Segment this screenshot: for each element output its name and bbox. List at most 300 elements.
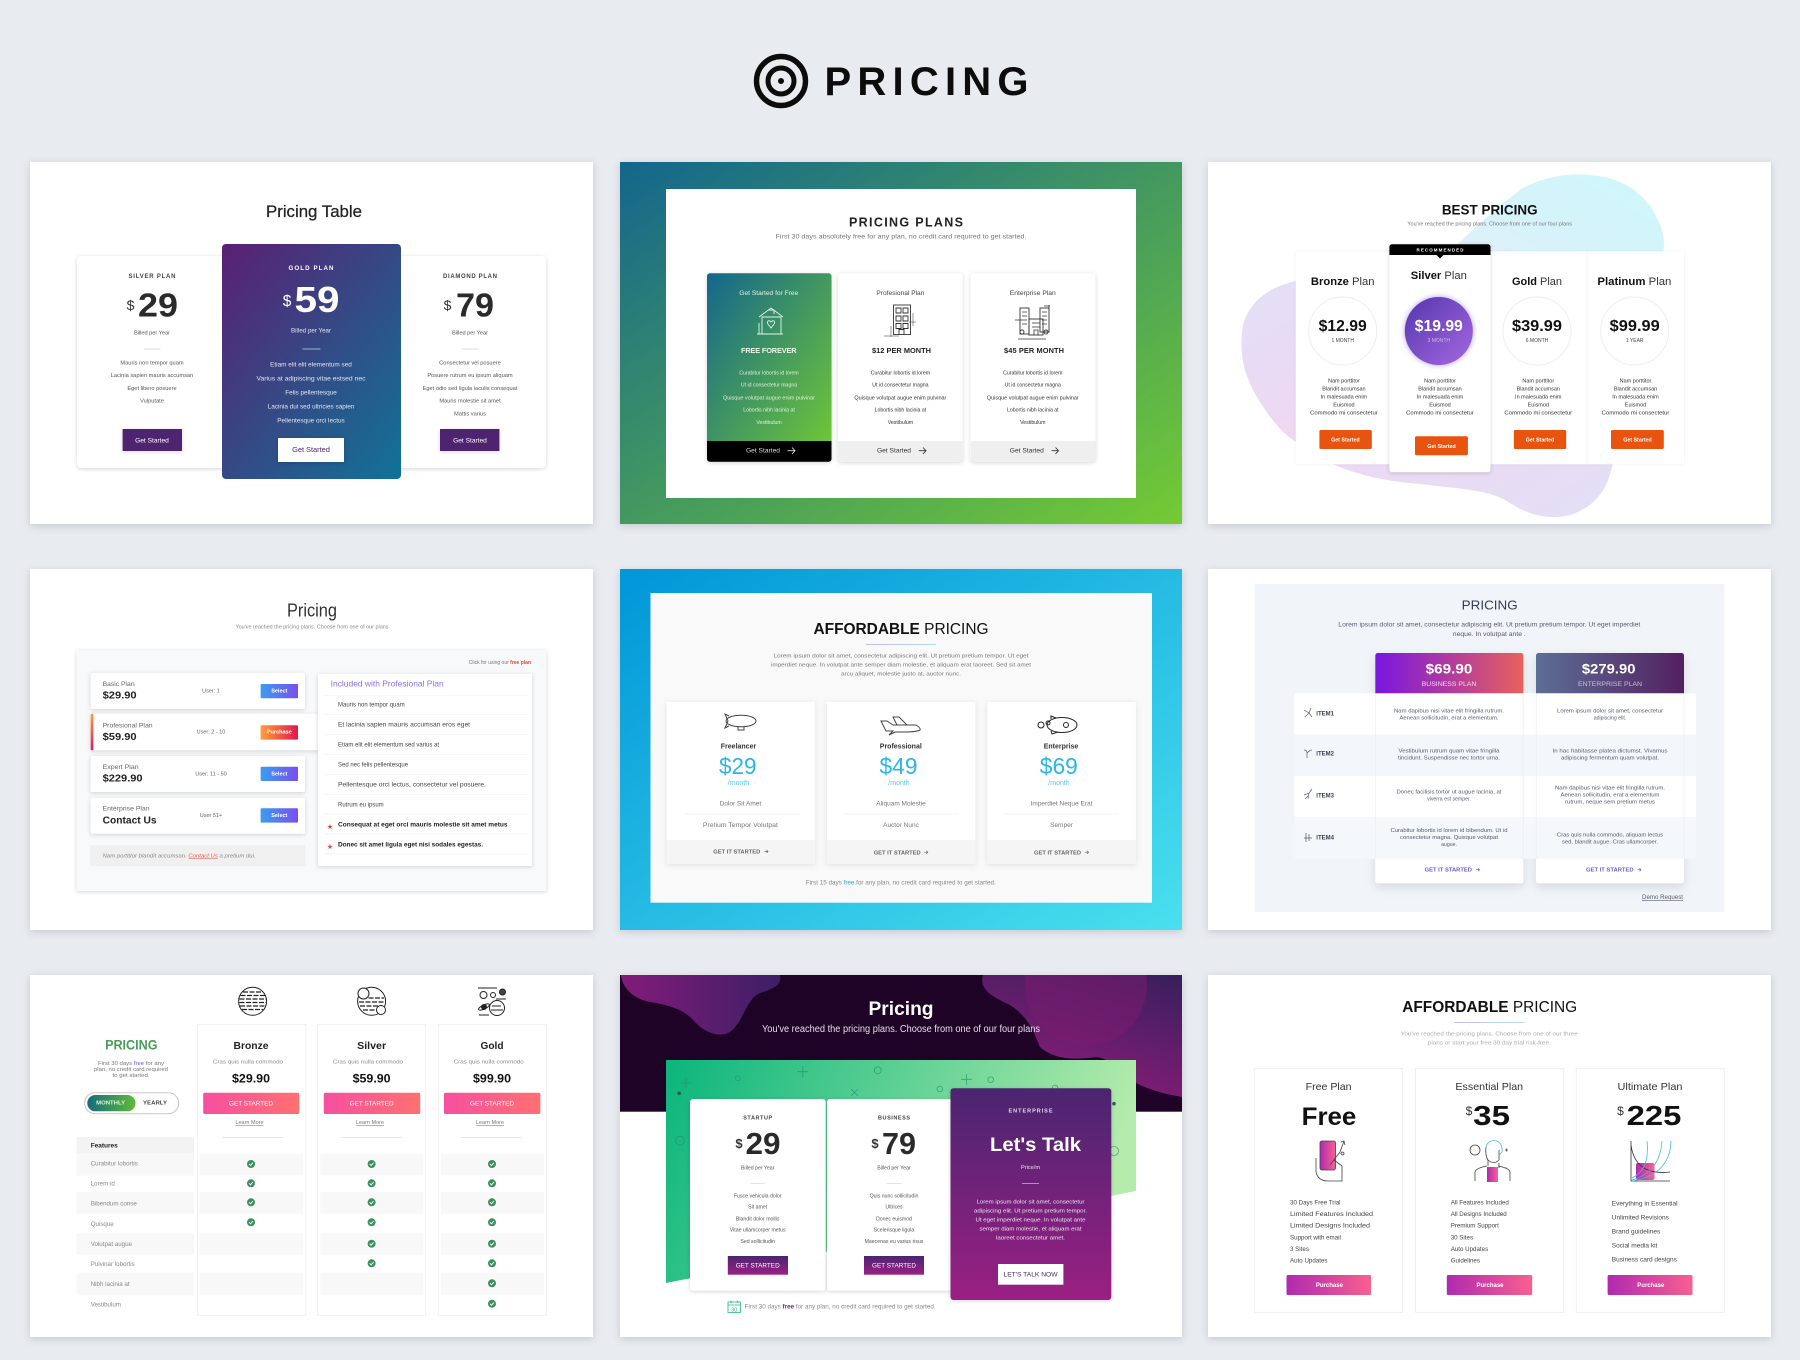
card: silver plan: Vulputate bbox=[140, 398, 164, 404]
card: gold plan: 59 bbox=[294, 279, 340, 320]
feature rows bbox=[1294, 693, 1696, 859]
icons: item glyphs bbox=[1304, 708, 1312, 842]
blob: purple bbox=[1241, 281, 1613, 517]
card: enterprise: Let's Talk bbox=[990, 1135, 1081, 1156]
enterprise plan cells: Lorem ipsum dolor sit amet, consectetur bbox=[1557, 708, 1663, 714]
card: professional plan: Profesional Plan bbox=[876, 290, 925, 297]
plan row: expert: Expert Plan bbox=[103, 764, 139, 771]
card: ultimate plan: Everything in Essential bbox=[1612, 1201, 1678, 1208]
checks: silver bbox=[368, 1160, 376, 1267]
card: gold plan: GOLD PLAN bbox=[288, 265, 334, 272]
heading: AFFORDABLE PRICING bbox=[814, 621, 988, 638]
card: freelancer: Dolor Sit Amet bbox=[720, 801, 761, 808]
card: bronze: Learn More bbox=[235, 1120, 264, 1126]
panel: best pricing bbox=[1208, 162, 1771, 524]
card: free plan: FREE FOREVER bbox=[741, 346, 797, 355]
card: essential plan: Guidelines bbox=[1451, 1258, 1480, 1265]
card: essential plan: Purchase bbox=[1476, 1283, 1504, 1289]
card: enterprise: ENTERPRISE bbox=[1008, 1108, 1053, 1114]
card: business: Ultrices bbox=[885, 1205, 903, 1211]
card: gold: GET STARTED bbox=[470, 1101, 514, 1108]
card: diamond plan: Mattis varius bbox=[454, 411, 486, 417]
included features list: Et lacinia sapien mauris accumsan eros eget bbox=[338, 723, 470, 729]
card: ultimate plan: Social media kit bbox=[1612, 1243, 1658, 1250]
card: silver: GET STARTED bbox=[350, 1101, 394, 1108]
cards base bbox=[1296, 251, 1684, 464]
card: silver recommended: Nam porttitor bbox=[1424, 379, 1456, 385]
plan row: professional bbox=[91, 714, 319, 750]
card: diamond plan: Billed per Year bbox=[452, 331, 488, 337]
heading: PRICING bbox=[1462, 597, 1518, 612]
card: silver plan: Get Started bbox=[135, 438, 169, 445]
card: bronze bbox=[197, 1024, 306, 1315]
card: business: Maecenas eu varius risus bbox=[865, 1239, 924, 1245]
included features list: ★ bbox=[327, 823, 333, 831]
card: enterprise: Price/m bbox=[1021, 1165, 1040, 1171]
card: silver plan: 29 bbox=[138, 287, 178, 324]
card: essential plan: Auto Updates bbox=[1451, 1246, 1488, 1253]
included features list: Donec sit amet ligula eget nisi sodales egestas. bbox=[338, 843, 483, 849]
card: gold plan: Billed per Year bbox=[291, 328, 331, 335]
card: platinum: Nam porttitor bbox=[1620, 379, 1652, 385]
card: enterprise: Imperdiet Neque Erat bbox=[1031, 801, 1093, 808]
plan row: enterprise bbox=[91, 798, 305, 834]
card: platinum: In malesuada enim bbox=[1612, 395, 1659, 401]
included features list: Consequat at eget orci mauris molestie sit amet metus bbox=[338, 823, 508, 829]
card: bronze: Bronze Plan bbox=[1311, 276, 1374, 288]
panel: pricing comparison bbox=[1208, 569, 1771, 930]
card: free plan: Auto Updates bbox=[1290, 1258, 1328, 1265]
card: diamond plan bbox=[423, 274, 518, 451]
card: professional plan bbox=[838, 273, 963, 462]
card: gold: Get Started bbox=[1526, 438, 1554, 444]
card: essential plan: 35 bbox=[1473, 1100, 1510, 1131]
card: professional plan: Lobortis nibh lacinia at bbox=[875, 408, 927, 414]
card: freelancer: GET IT STARTED bbox=[713, 850, 760, 856]
icon: calendar 30: 30 bbox=[731, 1308, 737, 1314]
card: enterprise plan: Curabitur lobortis id lorem bbox=[1003, 370, 1062, 376]
item labels: ITEM3 bbox=[1316, 794, 1335, 800]
card: bronze: GET STARTED bbox=[229, 1101, 273, 1108]
included features list: Rutrum eu ipsum bbox=[338, 803, 384, 809]
card: platinum: Platinum Plan bbox=[1597, 276, 1671, 288]
icon: arrow bbox=[919, 448, 926, 454]
card: gold: $99.90 bbox=[473, 1073, 511, 1085]
card: silver recommended: $19.99 bbox=[1415, 318, 1463, 335]
card: enterprise: adipiscing elit. Ut pretium pretium tempor. bbox=[974, 1209, 1087, 1215]
card: professional: $49 bbox=[880, 753, 918, 779]
card: bronze: 1 MONTH bbox=[1331, 338, 1354, 344]
business plan cells: Aenean sollicitudin, erat a elementum. bbox=[1400, 715, 1498, 721]
heading: BEST PRICING bbox=[1442, 202, 1538, 218]
card: essential plan: All Features Included bbox=[1451, 1199, 1509, 1206]
card: silver plan: Billed per Year bbox=[134, 331, 170, 337]
card: bronze: Get Started bbox=[1331, 438, 1360, 444]
item labels bbox=[1304, 708, 1335, 842]
divider bbox=[866, 643, 936, 646]
card: startup: Sit amet bbox=[748, 1205, 768, 1211]
subheading: You've reached the pricing plans. Choose from one of our plans bbox=[236, 625, 389, 631]
item labels: ITEM4 bbox=[1316, 835, 1335, 841]
card: free plan: Limited Features Included bbox=[1290, 1211, 1374, 1218]
panel: pricing table bbox=[30, 162, 593, 524]
heading: AFFORDABLE PRICING bbox=[1402, 999, 1577, 1016]
features table labels bbox=[76, 1137, 194, 1308]
subheading: You've reached the pricing plans. Choose from one of our three bbox=[1401, 1032, 1578, 1038]
heading: Pricing bbox=[287, 601, 337, 621]
card: free plan: Support with email bbox=[1290, 1234, 1341, 1241]
card: ultimate plan: 225 bbox=[1627, 1100, 1681, 1131]
plan row: expert: User: 11 - 50 bbox=[195, 771, 227, 777]
card: platinum: Blandit accumsan bbox=[1614, 387, 1657, 393]
card: platinum: $99.99 bbox=[1610, 318, 1660, 335]
panel: pricing list bbox=[30, 569, 593, 930]
intro text: imperdiet neque. In volutpat ante semper diam molestie, et aliquam erat laoreet. Sed sit amet bbox=[771, 662, 1031, 668]
features table labels: Curabitur lobortis bbox=[91, 1161, 138, 1168]
card: essential plan: 30 Sites bbox=[1451, 1234, 1473, 1241]
icon: rocket bbox=[1038, 716, 1077, 734]
icon: house with heart bbox=[757, 308, 783, 334]
free plan note: Click for using our free plan bbox=[469, 660, 531, 666]
enterprise plan cells: Aenean sollicitudin, erat a elementum bbox=[1560, 793, 1660, 799]
card: free plan: 3 Sites bbox=[1290, 1246, 1309, 1253]
features table labels: Vestibulum bbox=[91, 1301, 121, 1308]
card: gold: Euismod bbox=[1528, 403, 1549, 409]
card: essential plan: Premium Support bbox=[1451, 1223, 1499, 1230]
card: enterprise: semper diam molestie, et aliquam erat bbox=[980, 1227, 1082, 1233]
checks: bronze bbox=[247, 1160, 255, 1226]
card: silver plan: Lacinia sapien mauris accumsan bbox=[111, 373, 193, 379]
card: diamond plan: $ bbox=[444, 297, 452, 313]
plan row: basic bbox=[91, 673, 305, 709]
icon: small arrow bbox=[764, 850, 768, 853]
card: gold plan: Varius at adipiscing vitae estsed nec bbox=[256, 375, 366, 382]
business plan cells: Donec facilisis tortor ut augue lacinia, at bbox=[1396, 790, 1502, 796]
card: bronze: In malesuada enim bbox=[1321, 395, 1368, 401]
icon: small arrow bbox=[1085, 851, 1089, 854]
icon: arrow bbox=[788, 448, 795, 454]
card: free plan: Get Started for Free bbox=[739, 290, 799, 297]
card: ultimate plan: Business card designs bbox=[1612, 1257, 1678, 1264]
card: business: Scelerisque ligula bbox=[874, 1228, 914, 1234]
enterprise plan cells: adipiscing elit. bbox=[1594, 715, 1626, 721]
card: professional plan: Get Started bbox=[877, 448, 911, 455]
plan row: enterprise: User 51+ bbox=[200, 813, 222, 819]
included features list: Mauris non tempor quam bbox=[338, 703, 405, 709]
icon: airship bbox=[725, 714, 756, 730]
card: startup bbox=[690, 1099, 826, 1291]
left column: pricing intro: PRICING bbox=[105, 1037, 158, 1052]
card: diamond plan: DIAMOND PLAN bbox=[443, 274, 497, 280]
icon: building bbox=[884, 305, 916, 337]
card: diamond plan: 79 bbox=[456, 287, 494, 324]
card: professional plan: Curabitur lobortis id lorem bbox=[871, 370, 930, 376]
card: free plan: Free Plan bbox=[1306, 1081, 1352, 1093]
card: ultimate plan: Brand guidelines bbox=[1612, 1229, 1661, 1236]
card: gold: Commodo mi consectetur bbox=[1504, 411, 1572, 417]
card: gold: $39.99 bbox=[1512, 318, 1562, 335]
panel: affordable pricing white bbox=[1208, 975, 1771, 1337]
card: enterprise plan: $45 PER MONTH bbox=[1004, 346, 1064, 355]
icon: calendar 30 bbox=[728, 1300, 740, 1314]
card: freelancer: /month bbox=[728, 780, 749, 787]
card: silver: Silver bbox=[357, 1041, 386, 1052]
icon: arrow bbox=[1052, 448, 1058, 454]
card: ultimate plan: Purchase bbox=[1637, 1283, 1665, 1289]
card: gold plan: Lacinia dui sed ultricies sapien bbox=[268, 403, 355, 410]
container bbox=[76, 650, 546, 891]
card: freelancer: $29 bbox=[719, 753, 757, 779]
included features list: ★ bbox=[327, 843, 333, 851]
card: silver recommended bbox=[1389, 244, 1491, 472]
card: startup: Fusce vehicula dolor bbox=[734, 1193, 782, 1199]
card: platinum: Get Started bbox=[1623, 438, 1652, 444]
card: gold plan bbox=[222, 244, 401, 479]
card: bronze: Commodo mi consectetur bbox=[1310, 411, 1378, 417]
panel: pricing plans bbox=[620, 162, 1182, 524]
card: platinum: Commodo mi consectetur bbox=[1602, 411, 1670, 417]
card: enterprise: Lorem ipsum dolor sit amet, consectetur bbox=[976, 1200, 1085, 1206]
card: free plan: Limited Designs Included bbox=[1290, 1223, 1371, 1230]
card: free plan: Lobortis nibh lacinia at bbox=[743, 408, 795, 414]
icon: plane bbox=[881, 717, 920, 735]
icon: planets bbox=[478, 988, 506, 1016]
icon: small arrow bbox=[924, 851, 928, 854]
footnote with calendar icon bbox=[728, 1300, 936, 1314]
plan row: professional: Profesional Plan bbox=[103, 722, 153, 729]
billing toggle bbox=[85, 1093, 179, 1114]
heading: Pricing Table bbox=[266, 202, 362, 221]
card: gold: 6 MONTH bbox=[1526, 338, 1549, 344]
card: silver recommended: RECOMMENDED bbox=[1416, 247, 1464, 252]
card: silver recommended: Commodo mi consectetur bbox=[1406, 411, 1474, 417]
business plan cells: consectetur magna. Quisque volutpat bbox=[1400, 835, 1499, 841]
footnote with calendar icon: First 30 days free for any plan, no credit card required to get started. bbox=[745, 1305, 936, 1311]
enterprise plan cells: Nam dapibus nisi vitae elit fringilla rutrum. bbox=[1555, 786, 1665, 792]
card: platinum bbox=[1587, 252, 1671, 464]
card: startup: STARTUP bbox=[743, 1116, 773, 1122]
card: essential plan: $ bbox=[1466, 1104, 1473, 1118]
card: bronze bbox=[1309, 276, 1378, 449]
card: professional bbox=[827, 702, 975, 864]
features table labels: Volutpat augue bbox=[91, 1241, 133, 1248]
plan row: professional: $59.90 bbox=[103, 731, 137, 743]
icon: target logo bbox=[756, 56, 806, 106]
left column: pricing intro: First 30 days free for any bbox=[98, 1061, 164, 1067]
card: enterprise plan: Quisque volutpat augue enim pulvinar bbox=[987, 395, 1079, 401]
included features list: Pellentesque orci lectus, consectetur vel posuere. bbox=[338, 783, 486, 789]
subheading: You've reached the pricing plans. Choose from one of our four plans bbox=[1407, 221, 1573, 227]
card: enterprise: Ut eget imperdiet neque. In volutpat ante bbox=[976, 1218, 1086, 1224]
card: silver plan: Mauris non tempor quam bbox=[120, 361, 184, 367]
header: enterprise plan bbox=[1536, 653, 1684, 693]
billing toggle: YEARLY bbox=[143, 1101, 168, 1107]
card: bronze: Nam porttitor bbox=[1328, 379, 1360, 385]
card: free plan: 30 Days Free Trial bbox=[1290, 1199, 1341, 1206]
card: enterprise: laoreet consectetur amet. bbox=[996, 1236, 1065, 1242]
card: essential plan bbox=[1416, 1068, 1564, 1312]
card: diamond plan: Consectetur vel posuere bbox=[439, 361, 501, 367]
included features list bbox=[318, 674, 532, 866]
demo request link: Demo Request bbox=[1642, 895, 1683, 901]
card: free plan: Free bbox=[1302, 1103, 1356, 1131]
card: gold: Blandit accumsan bbox=[1517, 387, 1560, 393]
divider bbox=[1454, 1021, 1524, 1024]
card: silver recommended: Euismod bbox=[1429, 403, 1451, 409]
card: gold: Cras quis nulla commodo bbox=[454, 1060, 524, 1066]
card: ultimate plan: Ultimate Plan bbox=[1618, 1081, 1683, 1093]
card: silver: $59.90 bbox=[353, 1073, 391, 1085]
icon: city buildings bbox=[1015, 305, 1050, 339]
contact note bbox=[90, 845, 305, 866]
features table labels: Pulvinar lobortis bbox=[91, 1261, 135, 1268]
card: free plan bbox=[1255, 1068, 1403, 1312]
card: gold: Learn More bbox=[476, 1120, 504, 1126]
card: bronze: Euismod bbox=[1333, 403, 1355, 409]
title: PRICING bbox=[824, 60, 1028, 104]
panel: affordable pricing blue bbox=[620, 569, 1182, 930]
card: free plan: Quisque volutpat augue enim pulvinar bbox=[723, 395, 815, 401]
left column: pricing intro bbox=[94, 1037, 168, 1079]
plan row: enterprise: Select bbox=[271, 813, 288, 819]
header: business plan: BUSINESS PLAN bbox=[1422, 681, 1476, 688]
features table labels: Lorem id bbox=[91, 1181, 115, 1188]
card: free plan: Purchase bbox=[1316, 1283, 1344, 1289]
card: free plan: Curabitur lobortis id lorem bbox=[739, 370, 799, 376]
plan row: basic: User: 1 bbox=[202, 689, 220, 695]
card: essential plan: All Designs Included bbox=[1451, 1211, 1507, 1218]
intro text: Lorem ipsum dolor sit amet, consectetur adipiscing elit. Ut pretium pretium tempor. Ut eget imperdiet bbox=[1338, 621, 1641, 628]
card: gold plan: Get Started bbox=[292, 445, 330, 454]
card: gold plan: Pellentesque orci lectus bbox=[277, 417, 345, 424]
card: free plan: Get Started bbox=[746, 448, 780, 455]
card: enterprise: LET'S TALK NOW bbox=[1004, 1273, 1058, 1279]
plan row: basic: Select bbox=[271, 689, 288, 695]
card: gold plan: Felis pellentesque bbox=[285, 389, 337, 396]
card: professional plan: Quisque volutpat augue enim pulvinar bbox=[854, 395, 947, 401]
heading: Pricing bbox=[868, 999, 934, 1020]
included features list: Sed nec felis pellentesque bbox=[338, 763, 409, 769]
header: enterprise plan: ENTERPRISE PLAN bbox=[1578, 681, 1642, 688]
card: silver and diamond base bbox=[77, 256, 546, 468]
card: essential plan: Essential Plan bbox=[1455, 1081, 1523, 1093]
enterprise plan cells: adipiscing fermentum quam volutpat. bbox=[1561, 755, 1659, 761]
business plan cells: Nam dapibus nisi vitae elit fringilla rutrum. bbox=[1394, 708, 1504, 714]
icon: person bbox=[1470, 1141, 1510, 1182]
heading: PRICING PLANS bbox=[849, 215, 963, 229]
dark header band bbox=[620, 975, 1182, 1112]
intro text bbox=[771, 654, 1031, 677]
card: business: BUSINESS bbox=[878, 1116, 910, 1122]
business plan cells: Vestibulum rutrum quam vitae fringilla bbox=[1398, 748, 1500, 754]
plan row: expert bbox=[91, 756, 305, 792]
card: enterprise: Enterprise bbox=[1044, 743, 1078, 750]
card: ultimate plan: Unlimited Revisions bbox=[1612, 1215, 1670, 1222]
contact note: Nam porttitor blandit accumsan. Contact Us a pretium dui. bbox=[103, 853, 256, 859]
subheading: plans or start your free 30 day trial risk-free. bbox=[1428, 1041, 1551, 1047]
card: silver recommended: In malesuada enim bbox=[1417, 395, 1464, 401]
card: startup: GET STARTED bbox=[736, 1263, 780, 1270]
panel: dark pricing bbox=[620, 924, 1182, 1337]
billing toggle: MONTHLY bbox=[96, 1101, 126, 1107]
card: platinum: Euismod bbox=[1625, 403, 1646, 409]
card: diamond plan: Mauris molestie sit amet bbox=[439, 398, 501, 404]
card: silver bbox=[317, 1024, 426, 1315]
header: business plan: $69.90 bbox=[1426, 661, 1473, 677]
header: business plan bbox=[1375, 653, 1523, 693]
plan row: expert: Select bbox=[271, 771, 288, 777]
included features list: Etiam elit elit elementum sed varius at bbox=[338, 743, 439, 749]
card: freelancer: Freelancer bbox=[721, 743, 756, 750]
card: enterprise plan: Ut id consectetur magna bbox=[1005, 383, 1061, 389]
card: startup: Vitae ullamcorper metus bbox=[730, 1228, 786, 1234]
features table labels: Quisque bbox=[91, 1221, 114, 1228]
card: diamond plan: Get Started bbox=[453, 438, 487, 445]
card: enterprise bbox=[950, 1088, 1111, 1300]
header: enterprise plan: $279.90 bbox=[1582, 661, 1636, 677]
features table labels: Nibh lacinia at bbox=[91, 1281, 130, 1288]
card: silver plan: $ bbox=[127, 297, 135, 313]
card: professional plan: Vestibulum bbox=[888, 420, 913, 426]
card: ultimate plan: $ bbox=[1617, 1104, 1624, 1118]
footnote: First 15 days free for any plan, no credit card required to get started. bbox=[806, 881, 996, 887]
icon: globe bbox=[239, 987, 267, 1015]
card: professional: Auctor Nunc bbox=[883, 822, 920, 829]
item labels: ITEM2 bbox=[1316, 752, 1335, 758]
card: business: Quis nunc sollicitudin bbox=[870, 1193, 918, 1199]
card: startup: 29 bbox=[746, 1126, 780, 1161]
card: bronze: $12.99 bbox=[1319, 318, 1367, 335]
get it started links: GET IT STARTED bbox=[1586, 868, 1634, 874]
card: gold: Nam porttitor bbox=[1522, 379, 1554, 385]
enterprise plan cells: sed, blandit augue. Cras ullamcorper. bbox=[1562, 839, 1658, 845]
card: startup: Sed sollicitudin bbox=[740, 1239, 775, 1245]
card: diamond plan: Posuere rutrum eu ipsum aliquam bbox=[427, 373, 513, 379]
get it started links bbox=[1425, 868, 1641, 874]
card: enterprise: GET IT STARTED bbox=[1034, 850, 1081, 856]
card: diamond plan: Eget odio sed ligula iaculis consequat bbox=[423, 386, 518, 392]
enterprise plan cells: rutrum, neque sem pretium metus bbox=[1565, 799, 1655, 805]
card: startup: $ bbox=[735, 1136, 743, 1151]
plan row: basic: $29.90 bbox=[103, 690, 137, 702]
icon: phone in hand bbox=[1316, 1141, 1345, 1181]
card: silver: Cras quis nulla commodo bbox=[333, 1060, 403, 1066]
card: silver recommended: 3 MONTH bbox=[1428, 338, 1450, 344]
plan row: enterprise: Enterprise Plan bbox=[103, 806, 150, 813]
business plan cells: Curabitur lobortis id lorem id bibendum. Ut id bbox=[1390, 828, 1508, 834]
card: professional: GET IT STARTED bbox=[874, 850, 921, 856]
enterprise plan cells: Cras quis nulla commodo, aliquam lectus bbox=[1557, 833, 1663, 839]
card: business: Donec euismod bbox=[876, 1216, 912, 1222]
card: enterprise bbox=[987, 702, 1136, 864]
icon: globe with moons bbox=[358, 987, 386, 1015]
card: silver plan: Eget libero posuere bbox=[127, 386, 177, 392]
subheading: You've reached the pricing plans. Choose from one of our four plans bbox=[762, 1024, 1040, 1035]
card: gold plan: $ bbox=[283, 293, 292, 310]
intro text bbox=[1338, 621, 1641, 638]
card: gold plan: Etiam elit elit elementum sed bbox=[270, 361, 352, 368]
card: professional: Professional bbox=[880, 743, 922, 750]
card: professional: /month bbox=[888, 780, 910, 787]
card: gold bbox=[438, 1024, 546, 1315]
header bbox=[756, 56, 1028, 106]
card: enterprise plan: Enterprise Plan bbox=[1010, 290, 1056, 297]
card: enterprise plan: Get Started bbox=[1010, 448, 1044, 455]
left column: pricing intro: plan, no credit card required bbox=[94, 1067, 168, 1073]
enterprise plan cells bbox=[1552, 708, 1668, 845]
card: silver recommended: Get Started bbox=[1427, 444, 1456, 450]
card: silver plan bbox=[111, 274, 193, 451]
